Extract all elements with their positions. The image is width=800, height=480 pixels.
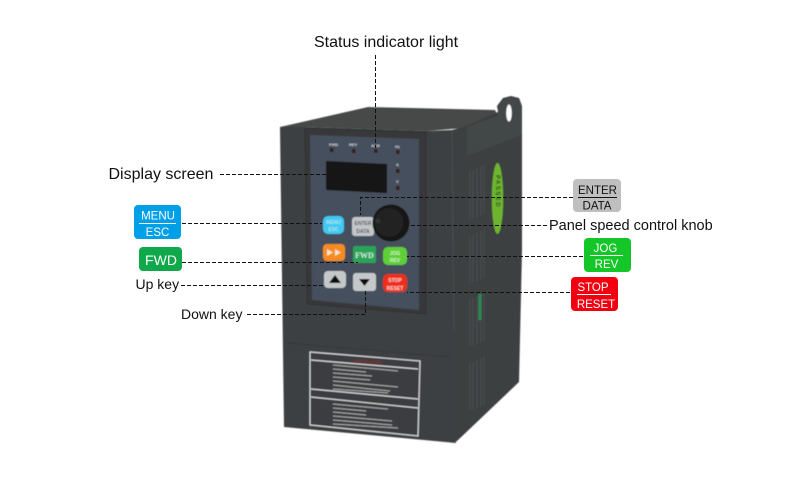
badge: MENU ESC: MENU [141,210,175,222]
down key [353,273,376,291]
status LEDs: REV [349,142,358,147]
up key [324,271,346,288]
badge: JOG REV: REV [595,259,619,271]
ENTER DATA key: DATA [356,229,370,235]
badge: JOG REV [584,238,631,272]
status LEDs: FWD [329,142,338,147]
MENU ESC key [323,216,344,234]
side green sticker: PASSED [494,175,500,208]
label: Up key: Up key [136,276,179,292]
JOG REV key: JOG [390,251,400,257]
status LEDs: A [396,162,399,167]
lower cover seam [287,343,450,357]
ENTER DATA key: ENTER [355,221,372,227]
device side face [452,96,522,443]
warning heading: WARNING [353,359,383,367]
badge: STOP RESET [571,277,618,311]
MENU ESC key: ESC [328,227,339,233]
FWD key [353,246,376,263]
STOP RESET key: RESET [387,286,403,292]
status LEDs: V [396,179,399,184]
status LEDs [329,142,400,190]
leader lines [181,55,583,314]
fast-forward key [323,244,345,261]
panel bezel [305,128,426,314]
badge: MENU ESC: ESC [146,227,169,239]
badge: MENU ESC [134,205,181,239]
label: Down key: Down key [181,306,242,322]
badge: ENTER DATA [573,179,621,212]
label: Panel speed control knob: Panel speed control knob [549,218,713,234]
STOP RESET key [383,274,407,292]
badge: ENTER DATA: ENTER [578,185,617,197]
device: frequency inverter [280,96,522,443]
JOG REV key: REV [390,258,401,264]
badge: STOP RESET: STOP [577,282,609,294]
speed control knob [372,204,410,242]
FWD key: FWD [355,251,374,260]
front corner highlight [452,130,454,330]
MENU ESC key: MENU [326,220,341,226]
badge: STOP RESET: RESET [577,299,615,311]
device top face [280,107,498,131]
device front face [280,127,456,443]
badge: JOG REV: JOG [594,243,617,255]
label: Display screen: Display screen [108,166,213,183]
JOG REV key [383,247,407,265]
badge: FWD: FWD [145,252,177,268]
ENTER DATA key [352,217,374,236]
mounting ear [467,97,522,156]
display screen [326,161,387,193]
badge: ENTER DATA: DATA [583,200,612,212]
status LEDs: Hz [395,144,400,149]
badge: FWD [139,247,182,271]
side vents [470,165,484,410]
warning text lines [333,365,398,428]
status LEDs: ALM [371,143,380,148]
control panel face [310,135,419,310]
label: Status indicator light: Status indicator light [314,34,459,51]
STOP RESET key: STOP [388,278,402,284]
side green terminal [478,294,482,320]
side green sticker [492,163,503,234]
warning label [310,352,420,436]
